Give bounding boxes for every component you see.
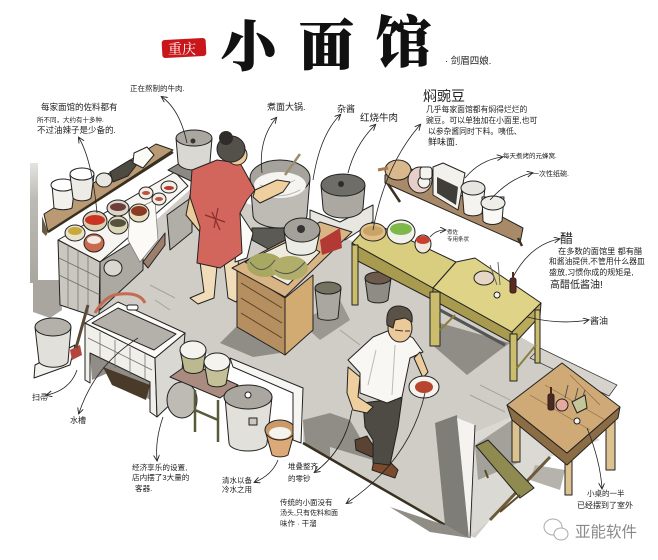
callouts: bottom: 味作 · 干溜 [280, 518, 317, 528]
central wooden table and cabinet [232, 218, 352, 355]
callouts: sauces: 鲜味面. [428, 136, 458, 147]
left pole [30, 163, 62, 318]
yellow serving tables [352, 222, 541, 381]
callouts: right side: 在多数的面馆里 都有醋 [558, 246, 642, 256]
callouts: right side: 和酱油提供,不管用什么器皿 [549, 256, 645, 266]
sink with tiles [85, 294, 185, 417]
callouts: bottom: 传统的小面没有 [280, 497, 333, 507]
callouts: right side: 小桌的一半 [587, 488, 625, 498]
pot with braised beef [310, 174, 373, 240]
callouts: bottom: 清水以备 [222, 475, 252, 485]
bowls on yellow table [360, 220, 431, 253]
big noodle pot on stove [250, 154, 310, 250]
watermark [544, 519, 637, 541]
callouts: bottom: 扫帚 [32, 392, 48, 402]
waiter with noodle bowl [347, 306, 439, 478]
callouts: right side [447, 151, 645, 510]
subtitle: · 剑眉四娘. [445, 55, 491, 67]
title: 小 [221, 17, 282, 78]
callouts: left side: 正在熬制的牛肉. [130, 83, 185, 93]
floor [95, 185, 617, 538]
small table, water buckets and tall bucket [167, 341, 295, 457]
square wooden table [507, 363, 620, 495]
callouts: bottom: 水槽 [70, 415, 86, 425]
curb wall [230, 358, 303, 443]
pot: simmering beef [168, 130, 215, 183]
callouts: right side: 已经摆到了室外 [577, 500, 633, 510]
callouts: right side: 每天煮烤的元蜂窝. [503, 151, 557, 160]
callouts: bottom: 冷水之用 [222, 484, 252, 494]
title: 面 [299, 16, 354, 77]
callouts: left side: 煮面大锅. [267, 101, 306, 112]
callouts: left side: 不过油辣子是少备的. [37, 125, 116, 135]
title [221, 13, 431, 78]
callouts: right side: 酱油 [590, 315, 608, 326]
callouts: sauces: 红烧牛肉 [360, 112, 398, 124]
callouts: right side: 醋 [560, 231, 573, 246]
condiments on table: vinegar and soy sauce [474, 262, 516, 298]
callouts: left side: 每家面馆的佐料都有 [41, 102, 118, 112]
title: 馆 [376, 13, 431, 74]
right wall shelf [378, 160, 523, 246]
callouts: sauces: 几乎每家面馆都有焖得烂烂的 [426, 104, 528, 114]
callouts: sauces [337, 88, 538, 147]
cook in red dress [186, 131, 290, 304]
callouts: bottom: 汤头,只有佐料和面 [280, 508, 338, 517]
callouts: right side: 盛放,习惯你成的规矩是, [549, 267, 633, 277]
upper left shelf with bowls [42, 144, 173, 236]
callouts: bottom: 堆叠整齐 [288, 461, 318, 471]
callouts: sauces: 豌豆。可以单独加在小面里,也可 [426, 115, 538, 125]
callouts: right side: 专用条状 [447, 235, 470, 243]
counter with tiles and sauce bowls [58, 172, 192, 318]
watermark: 亚能软件 [575, 523, 637, 541]
red stamp: Chongqing [162, 38, 206, 58]
callouts: right side: 煮佐 [447, 228, 459, 236]
buckets under table [315, 272, 391, 320]
callouts: bottom: 经济享乐的设置, [132, 462, 187, 472]
callouts: right side: 一次性纸碗. [532, 169, 569, 178]
callouts: bottom [32, 392, 338, 528]
left bucket and broom [34, 305, 88, 378]
callouts: right side: 高醋低酱油! [550, 278, 603, 291]
callouts: sauces: 杂酱 [337, 103, 355, 114]
bench [476, 440, 534, 512]
callouts: bottom: 店内摆了3大量的 [132, 472, 190, 482]
callout arrows [47, 97, 602, 503]
pillar in foreground [390, 415, 475, 538]
red stamp: Chongqing: 重庆 [168, 42, 196, 58]
callouts: left side: 所不同，大约有十多种. [37, 115, 104, 124]
callouts: bottom: 客器. [135, 483, 152, 493]
callouts: sauces: 焖豌豆 [423, 88, 465, 104]
callouts: sauces: 以参杂酱同时下料。咦低、 [428, 126, 522, 136]
callouts: bottom: 的零钞 [288, 473, 311, 483]
callouts: left side [37, 83, 306, 135]
